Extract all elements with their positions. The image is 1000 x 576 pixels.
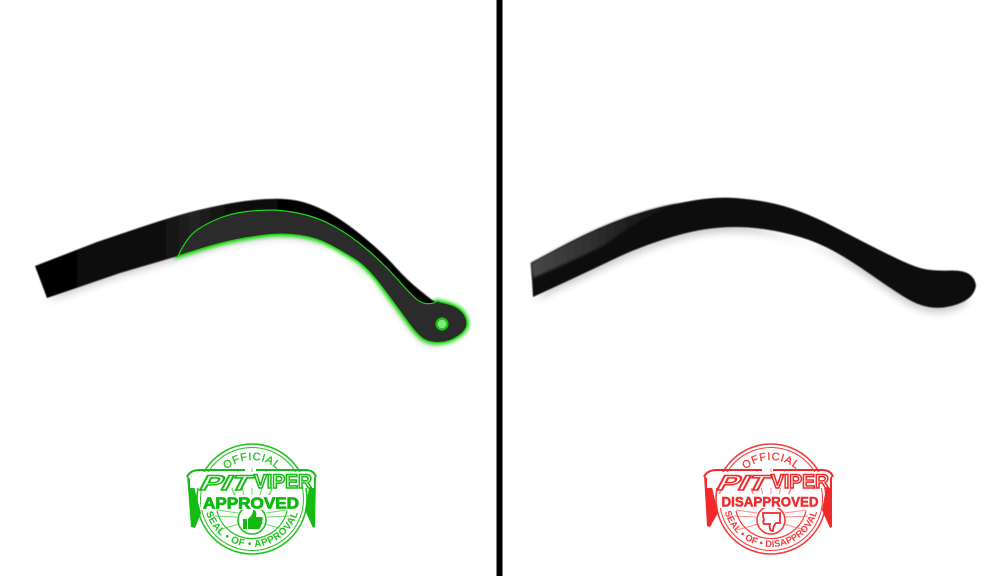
black temple body: [35, 199, 436, 310]
logo word: pit: PIT: [196, 471, 258, 495]
icon: thumbs up: [243, 510, 263, 529]
seal rays: [734, 468, 808, 530]
approved banner backing: [201, 495, 302, 510]
logo backing: [707, 472, 830, 488]
pivot hole: [436, 318, 448, 330]
logo fangs: [704, 475, 718, 527]
inner ring: [736, 511, 806, 539]
temple shadow: [47, 225, 440, 347]
seal bottom text: [723, 499, 819, 547]
grey inlay: [178, 210, 467, 343]
inner ring: [217, 511, 287, 539]
black temple body: [531, 198, 976, 308]
seal top text: [732, 460, 810, 499]
temple shadow: [535, 215, 970, 313]
seal rings: [716, 444, 826, 554]
logo word: viper: VIPER: [254, 472, 312, 493]
disapproved seal: [703, 443, 834, 555]
disapproved seal: OFFICIAL: [742, 452, 798, 469]
panel: approved temple arm: [35, 199, 467, 347]
logo word: viper: VIPER: [771, 472, 829, 493]
center divider: [496, 0, 502, 576]
logo swoosh: [187, 470, 316, 477]
seal bottom text: [204, 499, 300, 547]
approved seal: [186, 443, 317, 555]
disapproved banner backing: [719, 494, 820, 508]
green edge glow: [178, 210, 467, 343]
approved seal: OFFICIAL: [224, 452, 278, 469]
panel: disapproved temple arm: [531, 198, 976, 313]
disapproved seal: SEAL • OF • DISAPPROVAL: [725, 510, 818, 547]
disapproved banner text: DISAPPROVED: [722, 494, 819, 510]
logo backing: [190, 472, 314, 488]
logo word: pit: PIT: [713, 471, 775, 495]
approved seal: SEAL • OF • APPROVAL: [206, 511, 298, 548]
logo fangs: [187, 475, 201, 528]
seal rings: [197, 444, 307, 554]
approved banner text: APPROVED: [203, 496, 299, 512]
icon: thumbs down: [763, 513, 780, 531]
lighter top facet: [531, 203, 680, 278]
logo swoosh: [704, 470, 833, 477]
seal rays: [215, 468, 289, 530]
thumb badge: [238, 506, 266, 534]
thumb badge: [757, 506, 785, 534]
seal top text: [213, 460, 291, 499]
